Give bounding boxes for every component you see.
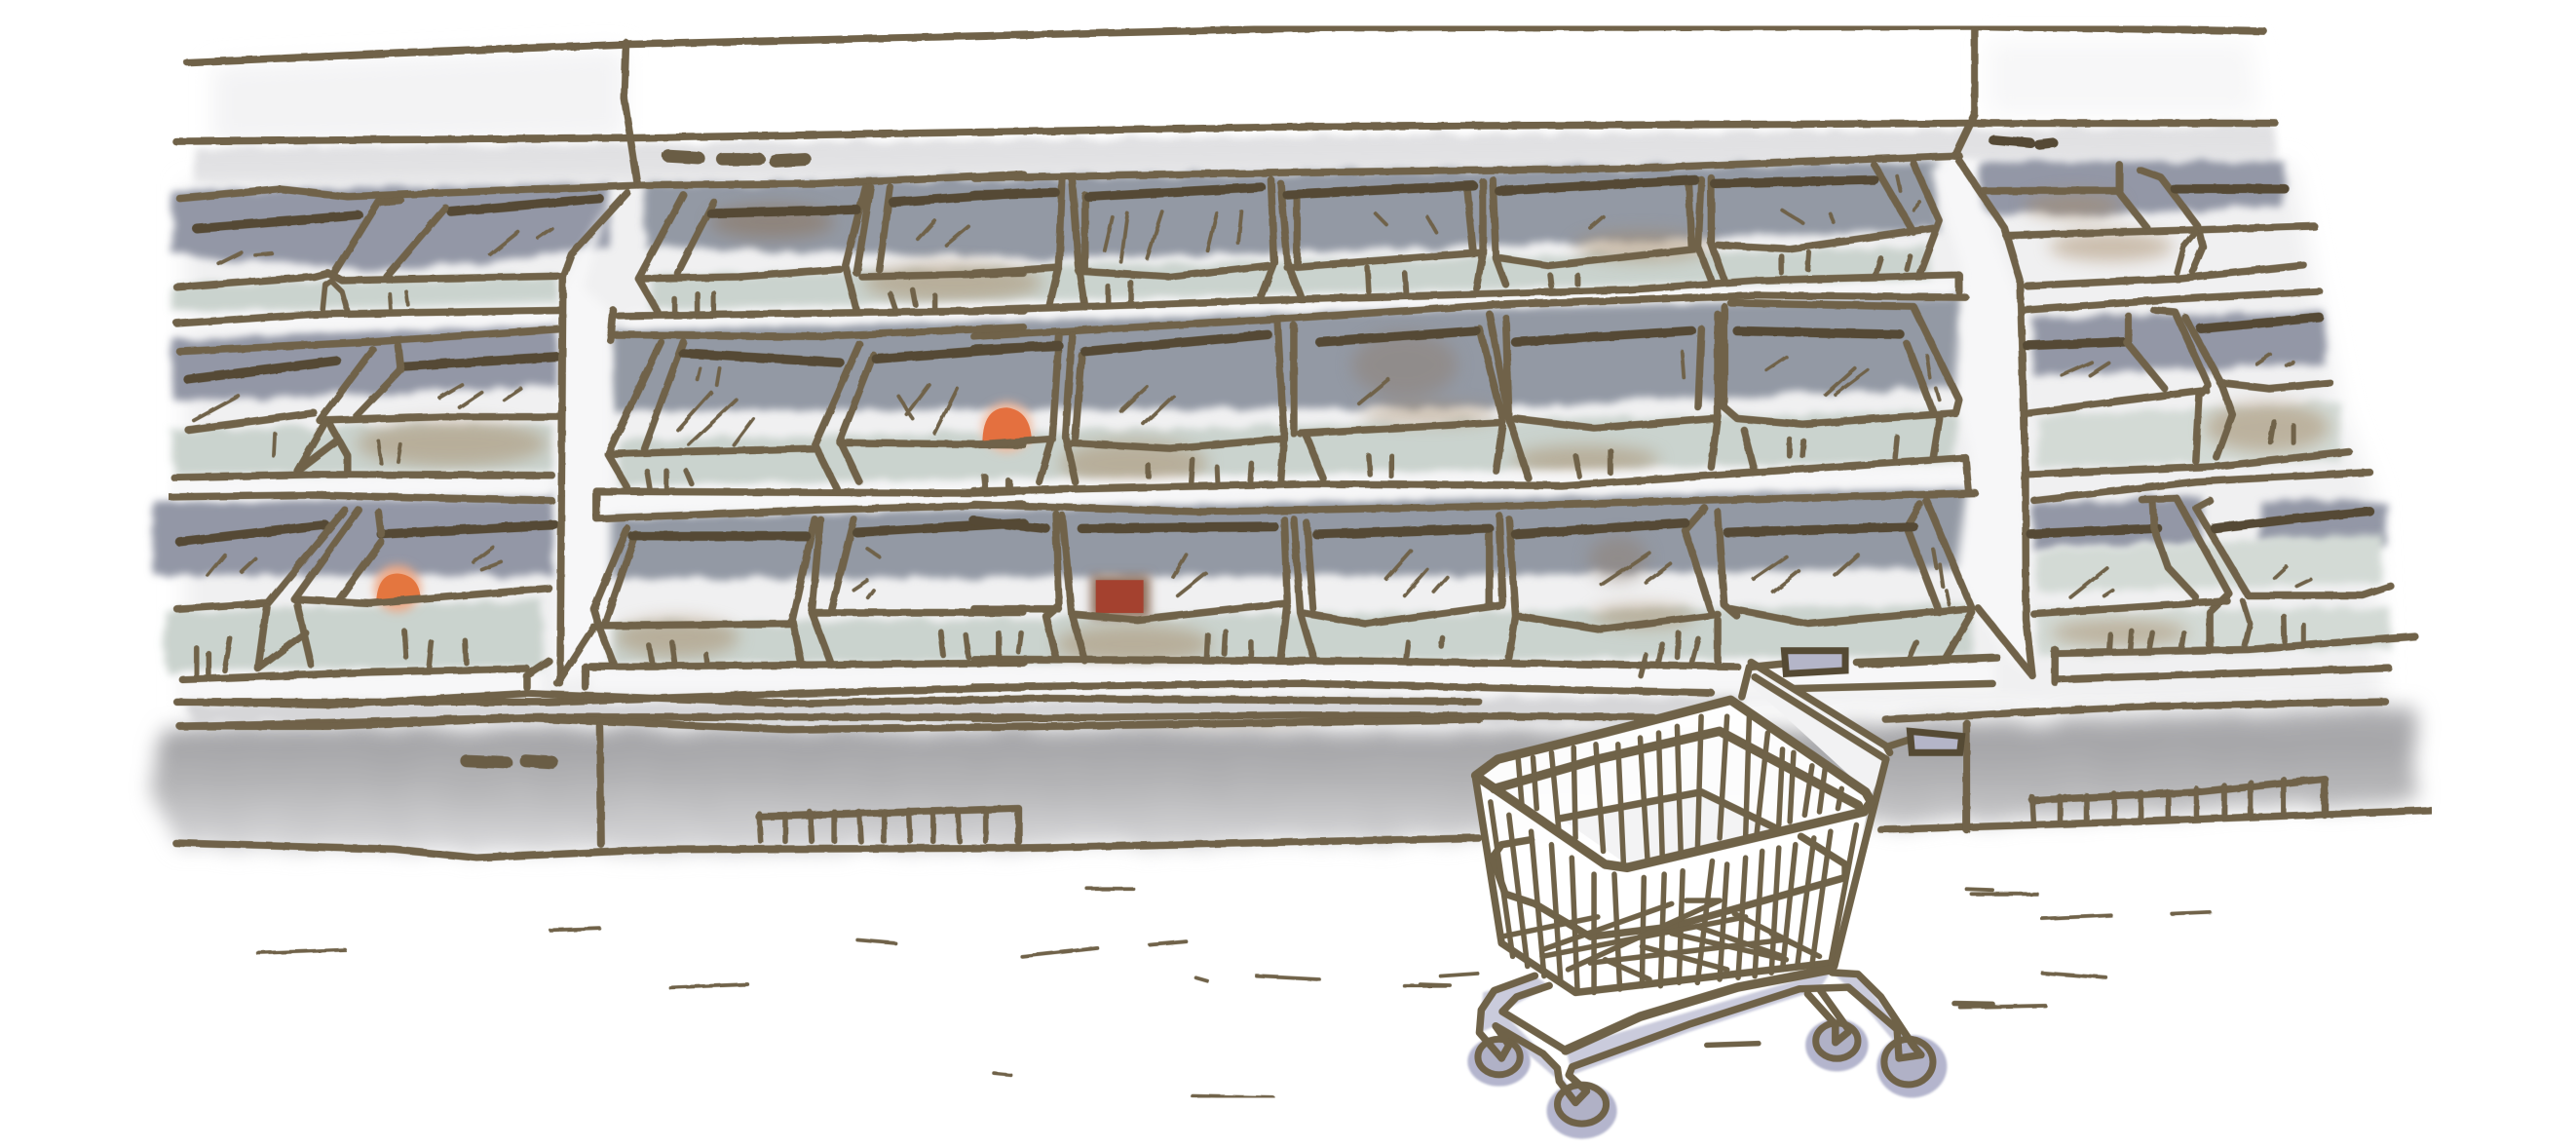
cart basket fill	[1476, 664, 1890, 992]
wash: green-grey lower shelf bands	[165, 247, 2390, 670]
cart basket wires	[1476, 700, 1872, 992]
price tag: orange, centre shelf	[982, 402, 1032, 452]
right shelving section	[1959, 161, 2415, 682]
product box: red	[1091, 575, 1150, 618]
cart grip: top	[1784, 651, 1845, 673]
kick panel details	[175, 694, 2432, 858]
wash: white pillars and shelf lips	[172, 165, 2028, 704]
floor marks near cart	[1421, 889, 1992, 1045]
watercolor washes: shelving unit	[151, 41, 2418, 855]
shopping cart	[1421, 651, 1992, 1139]
centre bays: first column	[586, 174, 1023, 687]
wash: cabinet base tone	[184, 165, 2382, 715]
vent grille: right	[2032, 779, 2325, 824]
cart wheels	[1478, 1023, 1933, 1124]
vent grille: left	[759, 809, 1018, 841]
left shelving section	[169, 185, 1023, 726]
cart shadow	[1467, 970, 1947, 1139]
fascia and canopy lines	[175, 26, 2275, 184]
wash: top fascia	[194, 41, 2275, 189]
cart base frame	[1479, 970, 1921, 1102]
price tag: orange, left shelf	[374, 565, 421, 611]
centre bays: columns two to six	[974, 156, 1997, 719]
floor scuff marks	[258, 889, 2210, 1097]
wash: lower kick panel	[151, 697, 2418, 855]
cart handle and frame	[1742, 657, 1992, 967]
wash: rust stains	[357, 192, 2330, 726]
cart grip: side	[1910, 731, 1962, 752]
wash: blue-grey upper shelf bands	[155, 161, 2385, 579]
